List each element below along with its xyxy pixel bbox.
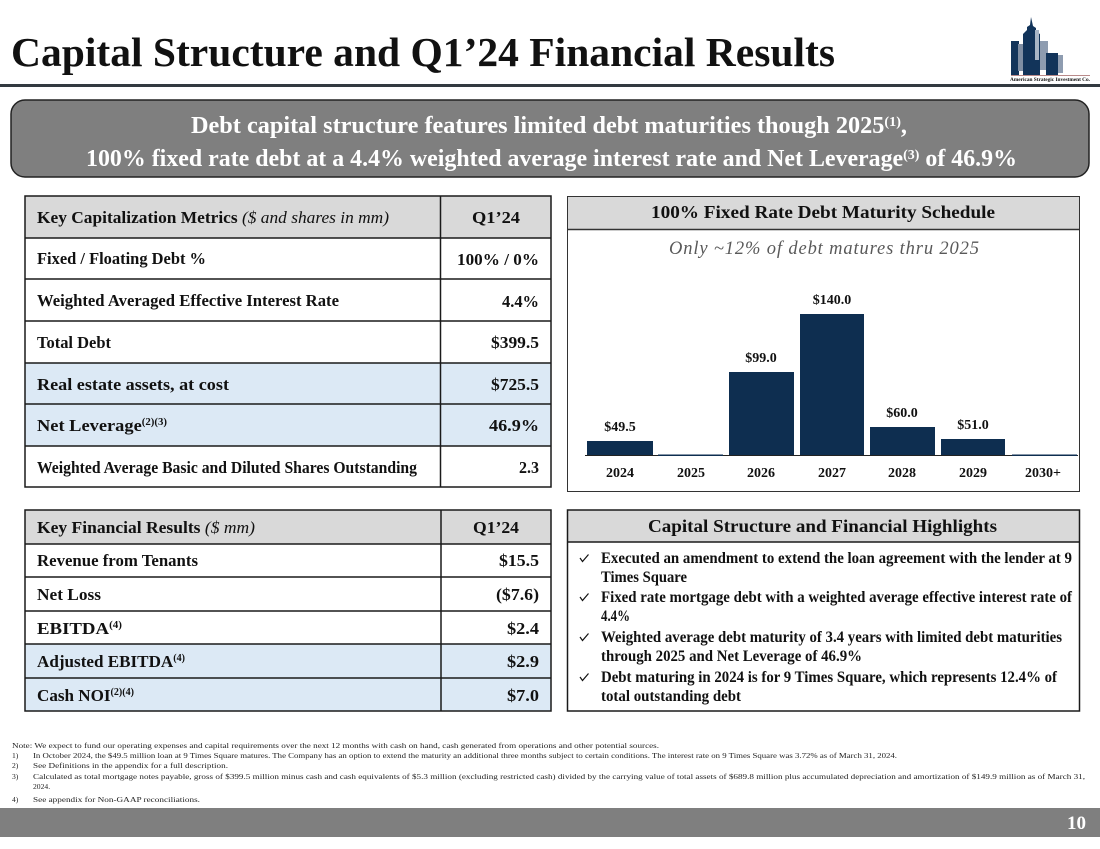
footnotes: See Definitions in the appendix for a full description.	[33, 761, 228, 770]
panel: key financial results table: $15.5	[499, 551, 539, 570]
panel: key capitalization metrics table: Net Leverage	[37, 416, 134, 435]
footnotes: 1)	[12, 751, 19, 760]
bar chart: debt maturities by year: 2024	[606, 466, 634, 481]
panel: capital structure and financial highlights	[567, 510, 1080, 711]
bar chart: debt maturities by year: $60.0	[886, 406, 918, 421]
bar chart: debt maturities by year: 2026	[747, 466, 775, 481]
bar chart: debt maturities by year: 2030+	[1025, 466, 1061, 481]
bar chart: debt maturities by year: $140.0	[813, 293, 851, 308]
footnotes: 2024.	[33, 782, 50, 791]
heading: highlights: Capital Structure and Financial Highlights	[648, 516, 997, 536]
panel: key capitalization metrics table: Fixed / Floating Debt %	[37, 249, 206, 268]
list: highlights bullets: through 2025 and Net Leverage of 46.9%	[601, 648, 862, 665]
bar chart: debt maturities by year: 2028	[888, 466, 916, 481]
list: highlights bullets: Times Square	[601, 569, 687, 586]
bar chart: debt maturities by year: 2029	[959, 466, 987, 481]
panel: key financial results table: Revenue from Tenants	[37, 551, 198, 570]
panel: key financial results table: (4)	[173, 653, 185, 664]
panel: key capitalization metrics table: 2.3	[519, 458, 539, 477]
footer bar with page number	[0, 808, 1100, 837]
panel: key financial results table: EBITDA	[37, 619, 102, 638]
footer bar with page number: 10	[1067, 813, 1086, 834]
list: highlights bullets: total outstanding debt	[601, 688, 742, 705]
bar chart: debt maturities by year: $99.0	[745, 351, 777, 366]
list: highlights bullets: Executed an amendment to extend the loan agreement with the lender at 9	[601, 550, 1072, 567]
panel: key capitalization metrics table: 100% / 0%	[457, 250, 539, 269]
footnotes: 2)	[12, 761, 19, 770]
panel: key capitalization metrics table	[25, 196, 551, 487]
bar chart: debt maturities by year: $51.0	[957, 418, 989, 433]
list: highlights bullets	[580, 550, 1073, 705]
icon: company logo	[1010, 17, 1091, 83]
panel: key financial results table: Key Financial Results ($ mm)	[37, 518, 255, 537]
panel: key financial results table: ($7.6)	[496, 585, 539, 604]
banner: key message: 100% fixed rate debt at a 4.4% weighted average interest rate and Net Leverage	[86, 146, 907, 172]
panel: key capitalization metrics table: $399.5	[491, 333, 539, 352]
footnotes: Note: We expect to fund our operating expenses and capital requirements over the next 12 months with cash on hand, cash generated from operations and other potential sources.	[12, 741, 659, 750]
panel: key financial results table: (4)	[109, 620, 122, 631]
panel: key capitalization metrics table: Weighted Averaged Effective Interest Rate	[37, 291, 339, 310]
bar chart: debt maturities by year: 2025	[677, 466, 705, 481]
list: highlights bullets: Fixed rate mortgage debt with a weighted average effective interest rate of	[601, 589, 1073, 606]
panel: key capitalization metrics table: $725.5	[491, 375, 539, 394]
panel: key capitalization metrics table: 46.9%	[489, 416, 539, 435]
footnotes	[12, 741, 1085, 804]
panel: key financial results table: (2)(4)	[111, 687, 134, 698]
title: Capital Structure and Q1’24 Financial Results	[11, 29, 835, 75]
bar chart: debt maturities by year: 2027	[818, 466, 846, 481]
panel: key financial results table: $2.9	[507, 652, 539, 671]
banner: key message: (3)	[903, 148, 920, 163]
list: highlights bullets: Debt maturing in 2024 is for 9 Times Square, which represents 12.4% of	[601, 669, 1058, 686]
list: highlights bullets: Weighted average debt maturity of 3.4 years with limited debt maturities	[601, 629, 1062, 646]
list: highlights bullets: 4.4%	[601, 608, 630, 625]
banner: key message: ,	[901, 113, 907, 139]
banner: key message: (1)	[884, 115, 901, 130]
banner: key message	[11, 100, 1089, 177]
panel: key financial results table: Adjusted EBITDA	[37, 652, 173, 671]
panel: key financial results table	[25, 510, 551, 711]
footnotes: In October 2024, the $49.5 million loan at 9 Times Square matures. The Company has an option to extend the maturity an additional three months subject to certain conditions. The interest rate on 9 Times Square was 3.72% as of March 31, 2024.	[33, 751, 897, 760]
panel: key financial results table: $2.4	[507, 619, 540, 638]
panel: key capitalization metrics table: Key Capitalization Metrics ($ and shares in mm)	[37, 208, 389, 227]
panel: key financial results table: $7.0	[507, 686, 539, 705]
footnotes: 3)	[12, 772, 19, 781]
footnotes: 4)	[12, 795, 19, 804]
text: maturity subtitle: Only ~12% of debt matures thru 2025	[669, 239, 979, 259]
panel: key capitalization metrics table: Q1’24	[472, 208, 521, 227]
footnotes: Calculated as total mortgage notes payable, gross of $399.5 million minus cash and cash equivalents of $5.3 million (excluding restricted cash) divided by the carrying value of total assets of $689.8 million plus accumulated depreciation and amortization of $149.9 million as of March 31,	[33, 772, 1085, 781]
banner: key message: Debt capital structure features limited debt maturities though 2025	[191, 113, 877, 139]
panel: key capitalization metrics table: (2)(3)	[142, 417, 167, 428]
panel: key capitalization metrics table: Real estate assets, at cost	[37, 375, 229, 394]
panel: key financial results table: Net Loss	[37, 585, 101, 604]
panel: key financial results table: Q1’24	[473, 518, 520, 537]
panel: key capitalization metrics table: Weighted Average Basic and Diluted Shares Outstanding	[37, 458, 417, 477]
panel: key capitalization metrics table: Total Debt	[37, 333, 111, 352]
heading: maturity schedule: 100% Fixed Rate Debt Maturity Schedule	[651, 202, 995, 222]
banner: key message: of 46.9%	[919, 146, 1017, 172]
bar chart: debt maturities by year: $49.5	[604, 420, 636, 435]
bar chart: debt maturities by year	[585, 293, 1078, 481]
panel: key financial results table: Cash NOI	[37, 686, 110, 705]
panel: key capitalization metrics table: 4.4%	[502, 292, 539, 311]
icon: company logo: American Strategic Investment Co.	[1010, 77, 1091, 83]
panel: debt maturity schedule	[567, 196, 1080, 492]
footnotes: See appendix for Non-GAAP reconciliations.	[33, 795, 200, 804]
